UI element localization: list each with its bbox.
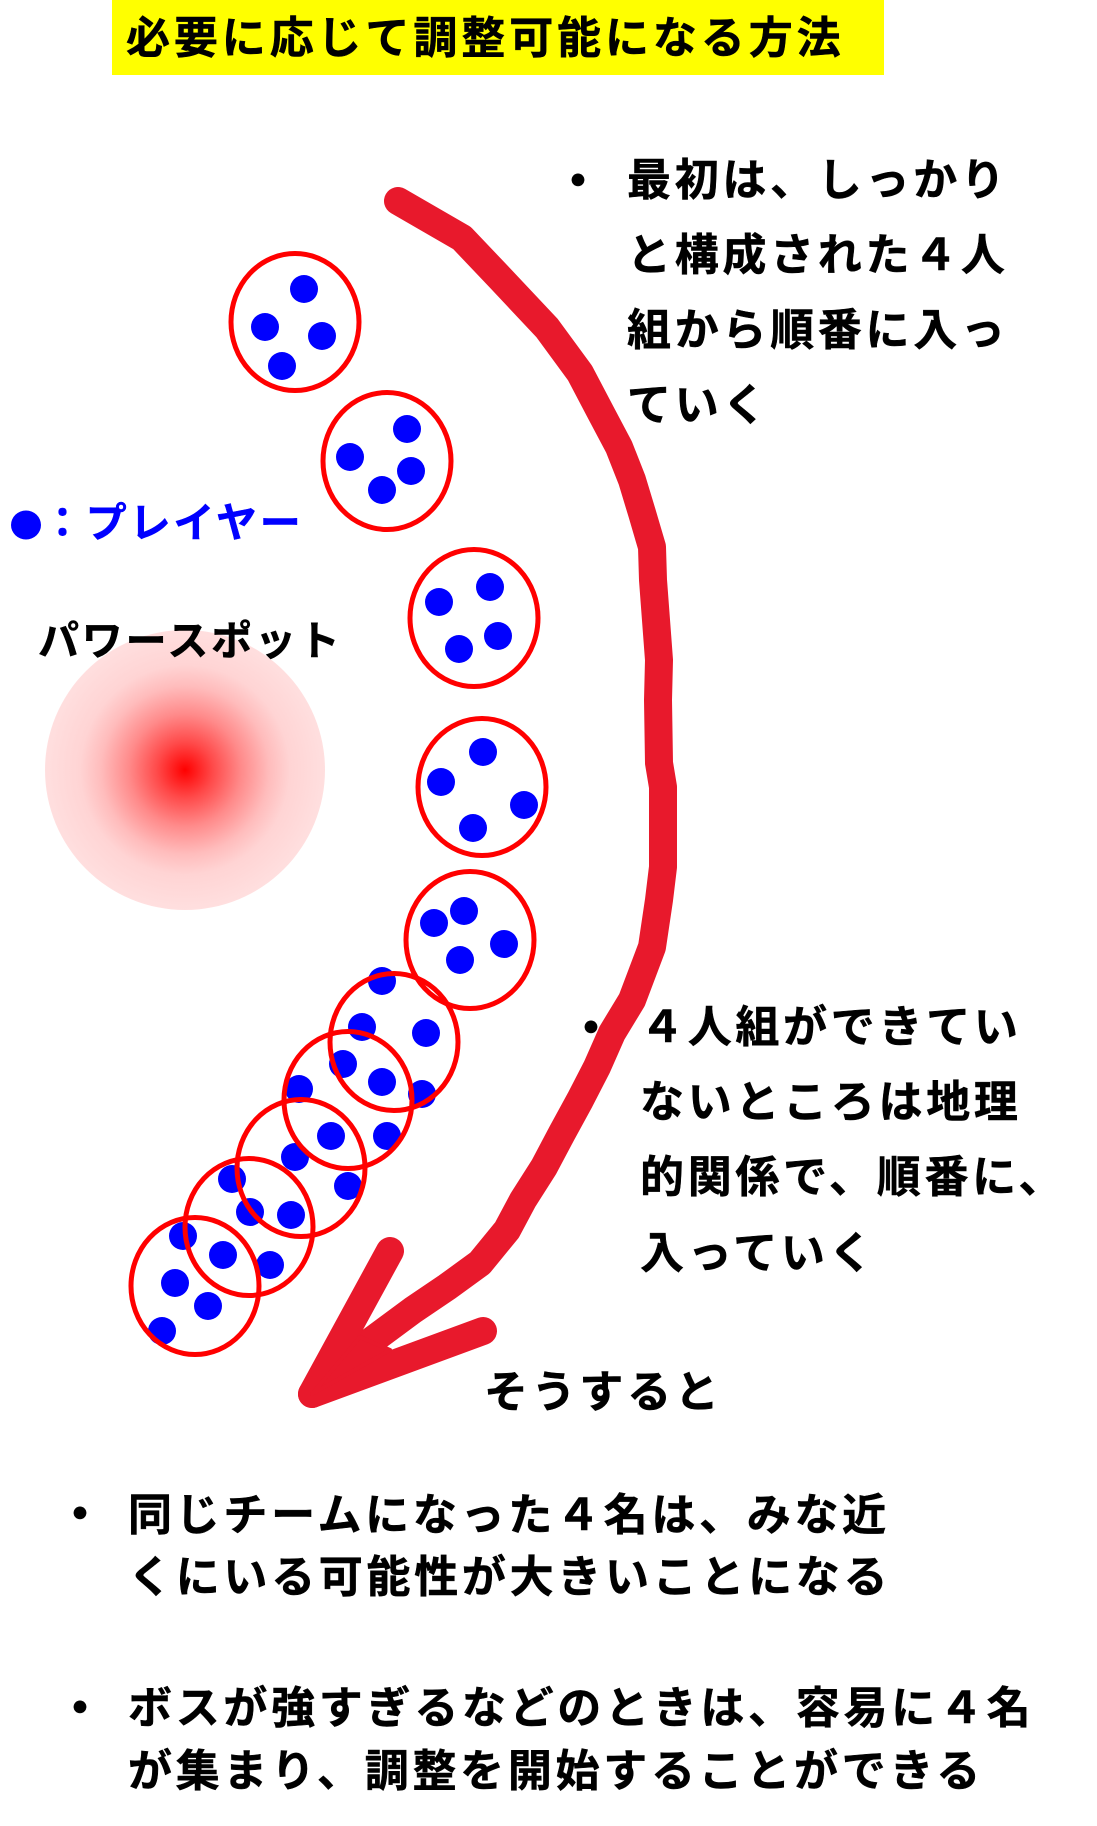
bullet text: second: 的関係で、順番に、 [640, 1153, 1066, 1202]
bullet text: second [567, 1003, 1066, 1278]
overlapping groups: outlines [131, 974, 458, 1354]
group 2 [323, 392, 451, 530]
group 4 [418, 718, 546, 856]
title banner [112, 0, 884, 75]
player groups [131, 254, 546, 1354]
overlapping groups: players [148, 967, 440, 1345]
bullet text: same team nearby: ・ [56, 1489, 104, 1542]
bullet text: boss too strong: ・ [56, 1683, 104, 1736]
bullet text: second: ４人組ができてい [640, 1003, 1022, 1052]
bullet text: boss too strong [56, 1683, 1034, 1796]
legend: player: ：プレイヤー [42, 500, 304, 546]
power spot: radial gradient circle [45, 630, 325, 910]
bullet text: second: ・ [567, 1003, 615, 1056]
group 5 [406, 872, 534, 1008]
bullet text: second: ないところは地理 [640, 1078, 1022, 1127]
bullet text: first: ・ [554, 156, 602, 209]
bullet text: same team nearby: くにいる可能性が大きいことになる [128, 1553, 891, 1602]
bullet text: second: 入っていく [640, 1229, 876, 1278]
bullet text: boss too strong: が集まり、調整を開始することができる [128, 1747, 984, 1796]
then label: そうすると [484, 1368, 722, 1417]
power spot label: パワースポット [38, 618, 343, 664]
bullet text: boss too strong: ボスが強すぎるなどのときは、容易に４名 [128, 1684, 1034, 1733]
bullet text: first: 組から順番に入っ [627, 306, 1009, 355]
title banner: 必要に応じて調整可能になる方法 [126, 14, 844, 63]
bullet text: same team nearby [56, 1489, 891, 1602]
bullet text: first: ていく [627, 381, 770, 430]
bullet text: same team nearby: 同じチームになった４名は、みな近 [128, 1491, 890, 1540]
bullet text: first: と構成された４人 [627, 231, 1009, 280]
group 1 [231, 254, 359, 390]
bullet text: first [554, 156, 1009, 430]
bullet text: first: 最初は、しっかり [627, 156, 1009, 205]
group 3 [410, 550, 538, 686]
big red curved arrow [312, 201, 663, 1394]
